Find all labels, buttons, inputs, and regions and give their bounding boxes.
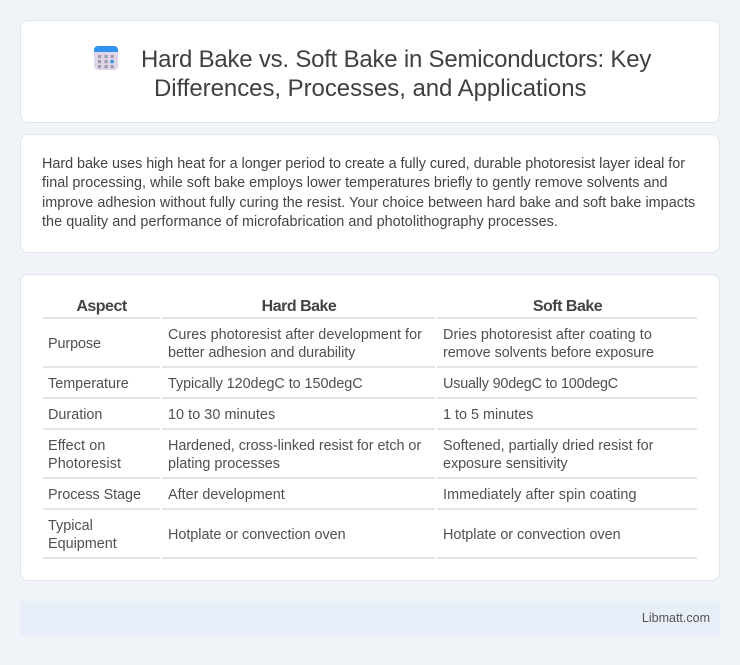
footer bar — [20, 601, 720, 635]
table header — [76, 298, 602, 315]
row: process stage: After development — [168, 487, 285, 503]
row: duration: 10 to 30 minutes — [168, 407, 275, 423]
intro paragraph — [42, 156, 695, 230]
intro paragraph: improve adhesion without fully curing the resist. Your choice between hard bake and soft bake impacts — [42, 195, 695, 211]
title text: Hard Bake vs. Soft Bake in Semiconductors: Key — [141, 46, 651, 73]
row: purpose: Purpose — [48, 336, 101, 352]
row: effect on photoresist: plating processes — [168, 456, 280, 472]
title text: Differences, Processes, and Applications — [154, 75, 586, 102]
row: typical equipment — [48, 518, 621, 552]
row: typical equipment: Hotplate or convection oven — [443, 527, 621, 543]
row: process stage: Process Stage — [48, 487, 141, 503]
row: typical equipment: Equipment — [48, 536, 117, 552]
row: typical equipment: Typical — [48, 518, 93, 534]
row: duration — [48, 407, 533, 423]
row: temperature: Temperature — [48, 376, 129, 392]
row: purpose: Cures photoresist after development for — [168, 327, 422, 343]
row: effect on photoresist: Softened, partially dried resist for — [443, 438, 653, 454]
row: temperature: Typically 120degC to 150degC — [168, 376, 363, 392]
table header: Hard Bake — [262, 298, 336, 315]
comparison table panel — [20, 274, 720, 581]
row: typical equipment: Hotplate or convection oven — [168, 527, 346, 543]
row: process stage: Immediately after spin coating — [443, 487, 637, 503]
intro paragraph: Hard bake uses high heat for a longer period to create a fully cured, durable photoresist layer ideal for — [42, 156, 685, 172]
title panel — [20, 20, 720, 123]
intro paragraph: final processing, while soft bake employs lower temperatures briefly to gently remove solvents and — [42, 175, 668, 191]
title text — [141, 46, 652, 102]
icon: calendar — [94, 46, 118, 70]
table header: Aspect — [76, 298, 127, 315]
row: duration: 1 to 5 minutes — [443, 407, 533, 423]
table header: Soft Bake — [533, 298, 602, 315]
row: effect on photoresist: exposure sensitivity — [443, 456, 568, 472]
intro paragraph: the quality and performance of microfabrication and photolithography processes. — [42, 214, 558, 230]
row: effect on photoresist — [48, 438, 654, 472]
row: effect on photoresist: Effect on — [48, 438, 105, 454]
row: purpose: Dries photoresist after coating to — [443, 327, 652, 343]
row: purpose: remove solvents before exposure — [443, 345, 654, 361]
row: temperature: Usually 90degC to 100degC — [443, 376, 618, 392]
row: purpose: better adhesion and durability — [168, 345, 355, 361]
row: effect on photoresist: Photoresist — [48, 456, 121, 472]
row: effect on photoresist: Hardened, cross-linked resist for etch or — [168, 438, 421, 454]
row: duration: Duration — [48, 407, 102, 423]
footer credit: Libmatt.com — [642, 611, 710, 625]
row: temperature — [48, 376, 618, 392]
intro text panel — [20, 134, 720, 253]
row: process stage — [48, 487, 637, 503]
row: purpose — [48, 327, 654, 361]
